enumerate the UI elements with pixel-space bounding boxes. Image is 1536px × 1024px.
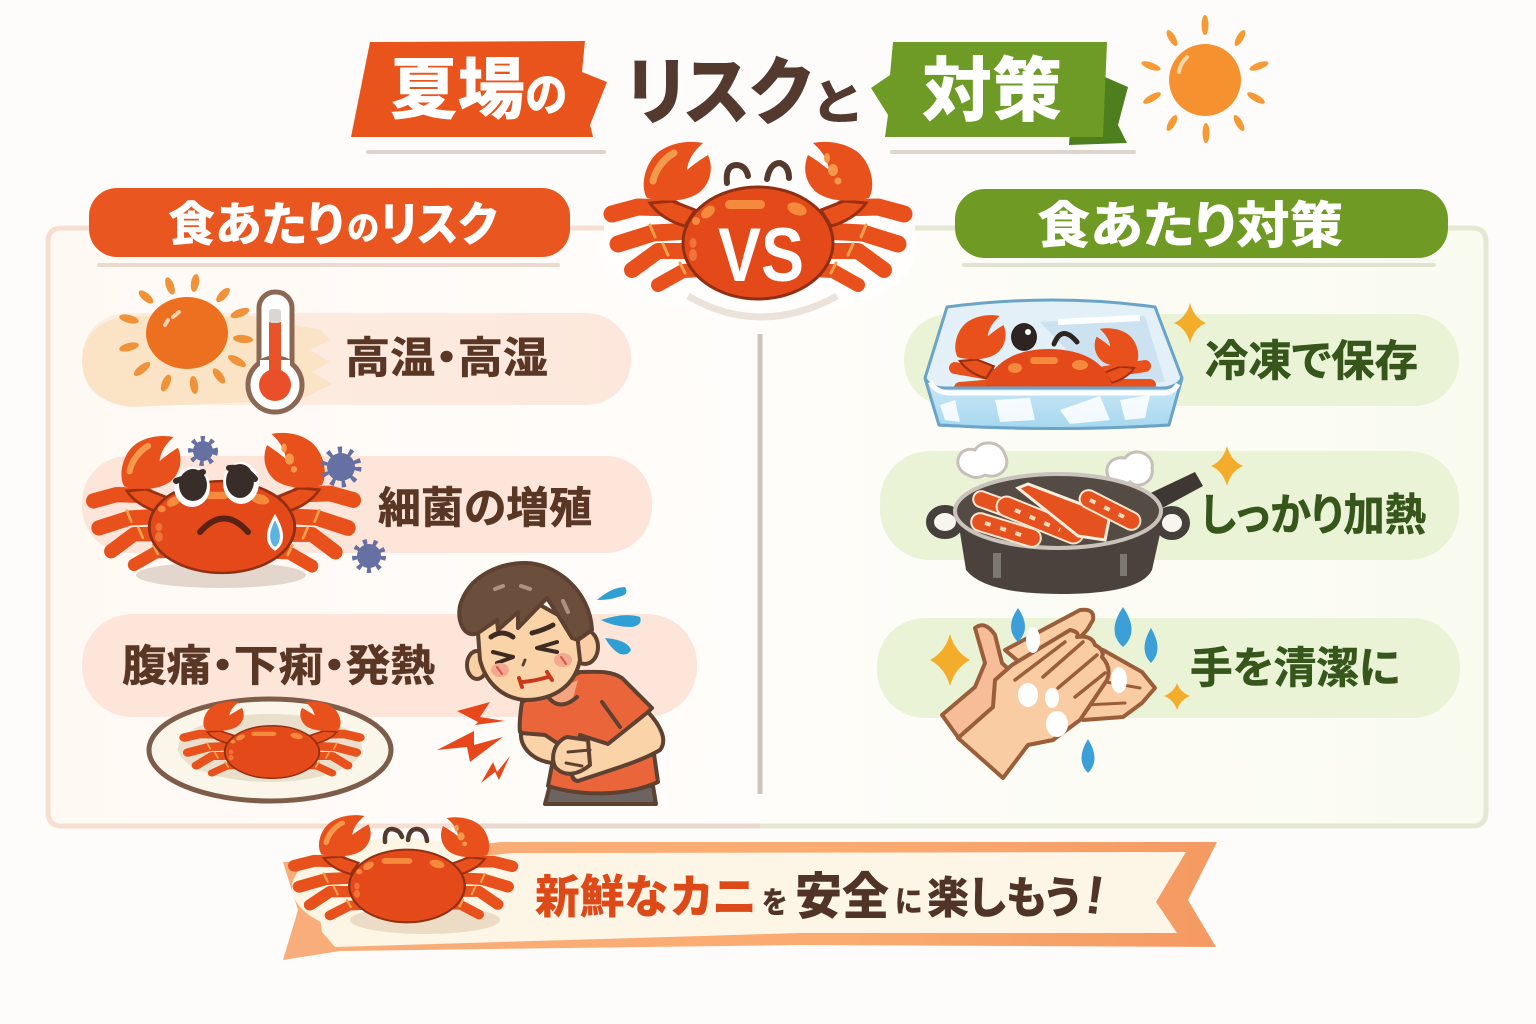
- measure row 2: heating: [880, 443, 1459, 594]
- title text: risk and: リスク: [626, 51, 811, 134]
- icon: banner crab: [292, 815, 512, 938]
- heading: measures: [955, 189, 1448, 267]
- title flag: measures: [871, 42, 1136, 154]
- risk row 2: bacteria: [82, 433, 652, 588]
- icon: thermometer: [248, 292, 302, 412]
- banner text: に: [895, 886, 922, 919]
- banner text: [535, 865, 1108, 927]
- icon: sweat drops: [597, 587, 641, 654]
- icon: germs: [191, 439, 383, 570]
- banner text: 安全: [795, 869, 889, 925]
- title: [351, 41, 1136, 154]
- heading: measures: 食あたり対策: [1037, 198, 1343, 254]
- title flag: summer: 夏場: [390, 53, 525, 128]
- banner text: カニ: [671, 871, 756, 923]
- icon: frozen crab box: [925, 300, 1182, 428]
- icon: title sun: [1140, 15, 1270, 143]
- panel: countermeasures: [480, 228, 1486, 827]
- heading: risk: リスク: [380, 198, 497, 251]
- banner text: 楽しもう: [927, 874, 1080, 923]
- center divider: [758, 334, 762, 794]
- banner text: 新鮮な: [535, 871, 668, 923]
- icon: pain bolts: [437, 702, 510, 783]
- measure row 1: freezing: [904, 300, 1459, 428]
- measure row 3: hand washing: [877, 607, 1460, 778]
- icon: pot with crab legs: [930, 472, 1203, 594]
- heading: risk: [89, 188, 570, 267]
- icon: sun: [118, 273, 253, 394]
- icon: sparkle: [1174, 303, 1206, 343]
- VS label: VS: [718, 213, 804, 298]
- measure row 1: freezing: 冷凍で保存: [1205, 338, 1418, 386]
- icon: sad crab: [94, 433, 353, 588]
- risk row 1: heat and humidity: [82, 273, 631, 412]
- bottom ribbon banner: [283, 815, 1217, 960]
- risk row 3: symptoms: [82, 563, 697, 804]
- risk row 1: heat and humidity: 高温・高湿: [345, 335, 548, 383]
- heading: risk: 食あたり: [168, 198, 344, 251]
- banner text: を: [762, 887, 787, 920]
- measure row 3: hand washing: 手を清潔に: [1190, 645, 1400, 693]
- icon: water drops: [1011, 607, 1158, 773]
- icon: washing hands: [942, 610, 1155, 778]
- risk row 2: bacteria: 細菌の増殖: [378, 485, 592, 533]
- icon: sparkles: [930, 634, 1190, 710]
- icon: sparkle: [1211, 446, 1243, 486]
- title flag: summer: [351, 41, 607, 154]
- banner text: !: [1082, 865, 1108, 927]
- panel: risks: [48, 228, 760, 827]
- risk row 3: symptoms: 腹痛・下痢・発熱: [122, 643, 435, 691]
- icon: VS crab: [600, 142, 916, 318]
- icon: boy with stomach ache: [459, 563, 663, 804]
- title flag: measures: 対策: [922, 52, 1062, 130]
- heading: risk: の: [347, 210, 379, 248]
- measure row 2: heating: しっかり加熱: [1200, 491, 1426, 540]
- icon: plate with crab: [149, 699, 391, 801]
- title flag: summer: の: [525, 69, 567, 121]
- title text: risk and: と: [814, 77, 859, 130]
- icon: soap bubbles: [1018, 627, 1127, 737]
- icon: steam clouds: [958, 443, 1152, 486]
